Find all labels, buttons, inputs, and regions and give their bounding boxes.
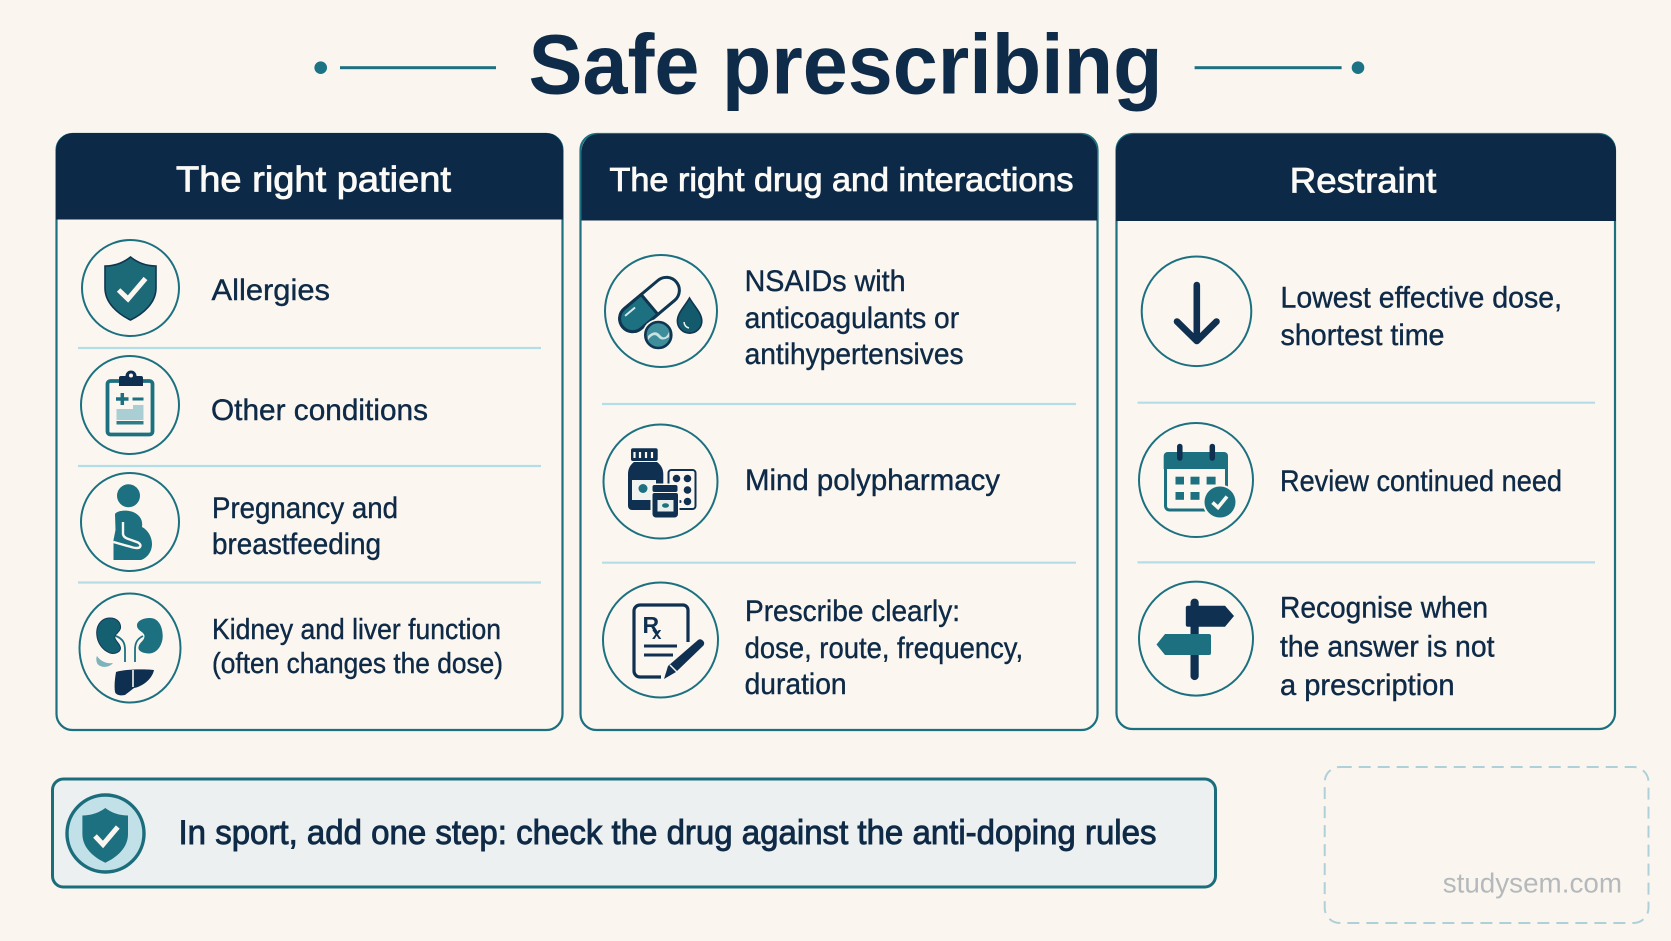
icon: shield badge [67, 795, 144, 872]
text: pregnancy and breastfeeding: Pregnancy and [212, 492, 398, 525]
text: prescribe clearly: Prescribe clearly: [745, 595, 960, 628]
heading: restraint: Restraint [1290, 160, 1436, 200]
text: NSAIDs: NSAIDs with [745, 265, 906, 298]
panel: the right patient [56, 133, 563, 730]
heading: restraint [1116, 134, 1616, 221]
text: kidney and liver function: Kidney and liver function [212, 614, 501, 646]
text: NSAIDs: antihypertensives [745, 338, 964, 371]
text: callout message: In sport, add one step: check the drug against the anti-doping rules [178, 814, 1156, 852]
text: recognise when [1280, 592, 1494, 702]
text: recognise when: the answer is not [1280, 630, 1494, 664]
callout: anti-doping [52, 779, 1216, 887]
text: kidney and liver function [212, 614, 503, 680]
text: NSAIDs [745, 265, 964, 371]
text: recognise when: a prescription [1280, 669, 1454, 702]
icon: signpost [1139, 582, 1253, 696]
text: prescribe clearly: dose, route, frequency, [745, 632, 1023, 665]
text: review continued need: Review continued need [1280, 465, 1562, 498]
icon: medicine bottles and blister pack [604, 424, 718, 538]
icon: pregnant person [81, 473, 179, 571]
text: mind polypharmacy: Mind polypharmacy [745, 464, 1000, 497]
heading: the right patient: The right patient [176, 158, 451, 200]
watermark box: studysem.com [1443, 868, 1622, 898]
text: prescribe clearly [745, 595, 1023, 701]
text: allergies: Allergies [212, 274, 330, 307]
icon: shield with check [82, 240, 179, 336]
panel: the right drug and interactions [580, 134, 1098, 730]
icon: prescription and pen: R [642, 612, 660, 638]
text: pregnancy and breastfeeding: breastfeeding [212, 528, 381, 561]
text: other conditions: Other conditions [211, 394, 428, 427]
heading: the right patient [56, 133, 563, 220]
panel: restraint [1116, 134, 1616, 729]
heading: the right drug and interactions [582, 134, 1097, 220]
icon: calendar with check [1139, 423, 1253, 537]
text: lowest effective dose: Lowest effective dose, [1280, 282, 1562, 315]
text: lowest effective dose [1280, 282, 1562, 352]
icon: kidneys and liver [80, 594, 180, 702]
text: recognise when: Recognise when [1280, 592, 1488, 625]
icon: prescription and pen [603, 582, 718, 698]
text: kidney and liver function: (often changes the dose) [212, 648, 503, 680]
icon: clipboard [81, 356, 179, 454]
text: NSAIDs: anticoagulants or [745, 302, 959, 335]
title with decorative rules [314, 18, 1364, 112]
text: lowest effective dose: shortest time [1280, 319, 1444, 352]
text: prescribe clearly: duration [745, 668, 847, 701]
icon: capsule, tablet and drop [605, 255, 717, 367]
icon: down arrow [1142, 256, 1251, 366]
title with decorative rules: Safe prescribing [528, 18, 1162, 112]
heading: the right drug and interactions: The right drug and interactions [610, 162, 1074, 199]
icon: prescription and pen: x [652, 624, 662, 643]
text: pregnancy and breastfeeding [212, 492, 398, 561]
watermark box [1325, 767, 1648, 923]
